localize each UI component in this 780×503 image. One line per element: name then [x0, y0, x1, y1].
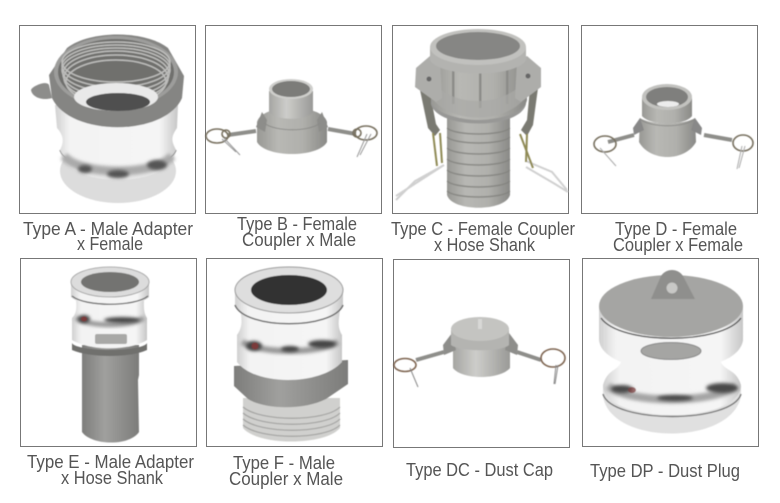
label: Type B — [237, 214, 357, 250]
label: Type D: Type D - Female — [615, 219, 737, 239]
icon: Type B female coupler by male fitting — [206, 79, 377, 157]
icon: Type A male adapter by female fitting — [31, 34, 184, 203]
label: Type E: x Hose Shank — [61, 468, 164, 488]
label: Type A: Type A - Male Adapter — [23, 219, 193, 239]
panel: Type D — [582, 26, 758, 214]
panel: Type A — [20, 26, 196, 214]
label: Type F — [229, 453, 343, 489]
label: Type A: x Female — [77, 234, 143, 254]
label: Type B: Coupler x Male — [242, 230, 356, 250]
panel: Type DC — [394, 260, 570, 448]
label: Type DP: Type DP - Dust Plug — [590, 461, 740, 481]
label: Type D: Coupler x Female — [613, 235, 743, 255]
label: Type C — [391, 219, 575, 255]
label: Type F: Coupler x Male — [229, 469, 343, 489]
panel: Type DP — [582, 258, 758, 446]
label: Type E: Type E - Male Adapter — [27, 452, 194, 472]
label: Type B: Type B - Female — [237, 214, 357, 234]
panel: Type E — [20, 258, 196, 446]
label: Type F: Type F - Male — [233, 453, 335, 473]
panel: Type C — [392, 26, 568, 214]
label: Type C: x Hose Shank — [434, 235, 536, 255]
icon: Type F male coupler by male fitting — [234, 267, 348, 442]
label: Type A — [23, 219, 193, 254]
icon: Type DC dust cap — [394, 317, 565, 387]
icon: Type C female coupler by hose shank — [396, 29, 568, 208]
panel: Type F — [206, 258, 382, 446]
label: Type DC: Type DC - Dust Cap — [406, 460, 553, 480]
panel: Type B — [206, 26, 382, 214]
icon: Type E male adapter by hose shank — [71, 267, 149, 442]
icon: Type D female coupler by female fitting — [594, 84, 753, 169]
label: Type E — [27, 452, 194, 488]
label: Type D — [613, 219, 743, 255]
label: Type C: Type C - Female Coupler — [391, 219, 575, 239]
icon: Type DP dust plug — [599, 270, 743, 434]
